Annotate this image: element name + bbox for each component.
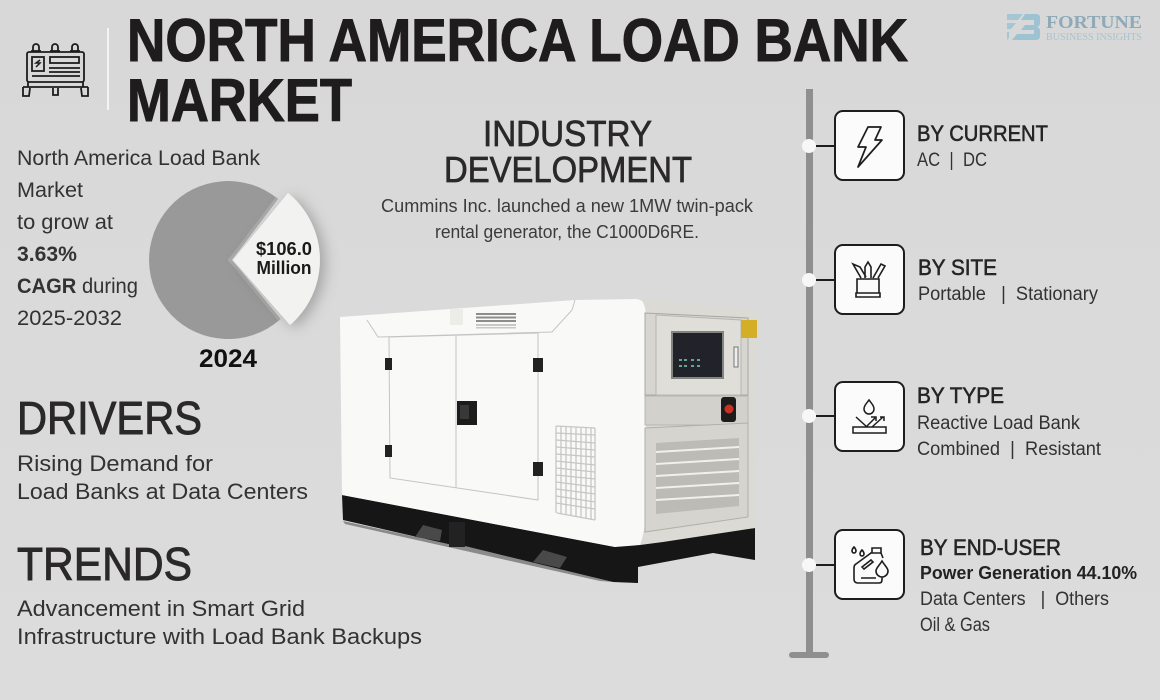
generator side panel — [640, 299, 757, 545]
trends text: Infrastructure with Load Bank Backups — [17, 624, 422, 649]
industry development text: Cummins Inc. launched a new 1MW twin-pack — [381, 196, 754, 216]
warning label — [741, 320, 757, 338]
louvre panel — [645, 423, 748, 532]
drivers text: Load Banks at Data Centers — [17, 479, 308, 504]
pie slice highlight: $106.0 — [256, 239, 312, 259]
title: MARKET — [127, 67, 352, 134]
label: by site: BY SITE — [918, 255, 997, 280]
trends text: Advancement in Smart Grid — [17, 596, 305, 621]
logo: Fortune Business Insights: BUSINESS INSIGHTS — [1046, 32, 1142, 43]
label: by site — [918, 255, 1098, 305]
heading: drivers: DRIVERS — [17, 392, 202, 444]
generator illustration — [340, 299, 757, 583]
trends text — [17, 596, 422, 649]
text: market growth: Market — [17, 178, 83, 202]
pie chart: 2024 market size — [149, 181, 320, 339]
icon box: lightning — [835, 111, 904, 180]
label: by current — [917, 121, 1048, 171]
drivers text — [17, 451, 308, 504]
generator white housing — [340, 299, 650, 547]
pie year label: 2024 — [199, 345, 257, 373]
label: by end-user — [920, 535, 1137, 636]
label: by type: Combined | Resistant — [917, 439, 1102, 460]
label: by end-user: Data Centers | Others — [920, 589, 1109, 610]
industry development text: rental generator, the C1000D6RE. — [435, 222, 699, 242]
heading: industry development: DEVELOPMENT — [444, 149, 692, 190]
label: by type: Reactive Load Bank — [917, 413, 1080, 434]
logo: Fortune Business Insights — [1007, 12, 1142, 43]
door hinges and latch — [385, 358, 543, 476]
text: market growth: 2025-2032 — [17, 306, 122, 330]
category: by end-user — [802, 530, 1137, 636]
title — [127, 7, 908, 134]
header divider — [107, 28, 109, 110]
heading: industry development: INDUSTRY — [483, 113, 652, 154]
pie slice highlight: Million — [256, 258, 312, 278]
logo: Fortune Business Insights: FORTUNE — [1046, 12, 1142, 32]
heading: industry development — [444, 113, 692, 190]
label: by type: BY TYPE — [917, 383, 1004, 408]
top vents — [476, 313, 516, 322]
label: by end-user: Power Generation 44.10% — [920, 563, 1137, 583]
emergency stop — [645, 396, 748, 425]
heading: trends: TRENDS — [17, 538, 192, 590]
category: by current — [802, 111, 1048, 180]
text: market growth: to grow at — [17, 210, 113, 234]
category: by type — [802, 382, 1102, 460]
label: by current: BY CURRENT — [917, 121, 1048, 146]
text: market growth — [17, 146, 260, 330]
text: market growth: 3.63% — [17, 242, 77, 266]
label: by type — [917, 383, 1102, 460]
label: by end-user: BY END-USER — [920, 535, 1061, 560]
door outline — [367, 300, 575, 500]
label: by current: AC | DC — [917, 150, 987, 171]
pie slice highlight — [233, 193, 320, 325]
timeline spine — [789, 89, 829, 658]
text: market growth: CAGR during — [17, 274, 138, 298]
text: market growth: North America Load Bank — [17, 146, 260, 170]
title: NORTH AMERICA LOAD BANK — [127, 7, 908, 74]
icon box: reflecting drop — [835, 382, 904, 451]
control panel — [645, 313, 748, 395]
icon: load bank unit — [23, 44, 88, 96]
generator base — [342, 495, 755, 583]
icon box: pencil cup — [835, 245, 904, 314]
category: by site — [802, 245, 1098, 314]
icon box: oil can — [835, 530, 904, 599]
side grille — [556, 426, 595, 520]
label: by end-user: Oil & Gas — [920, 615, 990, 636]
drivers text: Rising Demand for — [17, 451, 214, 476]
industry development text — [381, 196, 754, 242]
label: by site: Portable | Stationary — [918, 284, 1098, 305]
